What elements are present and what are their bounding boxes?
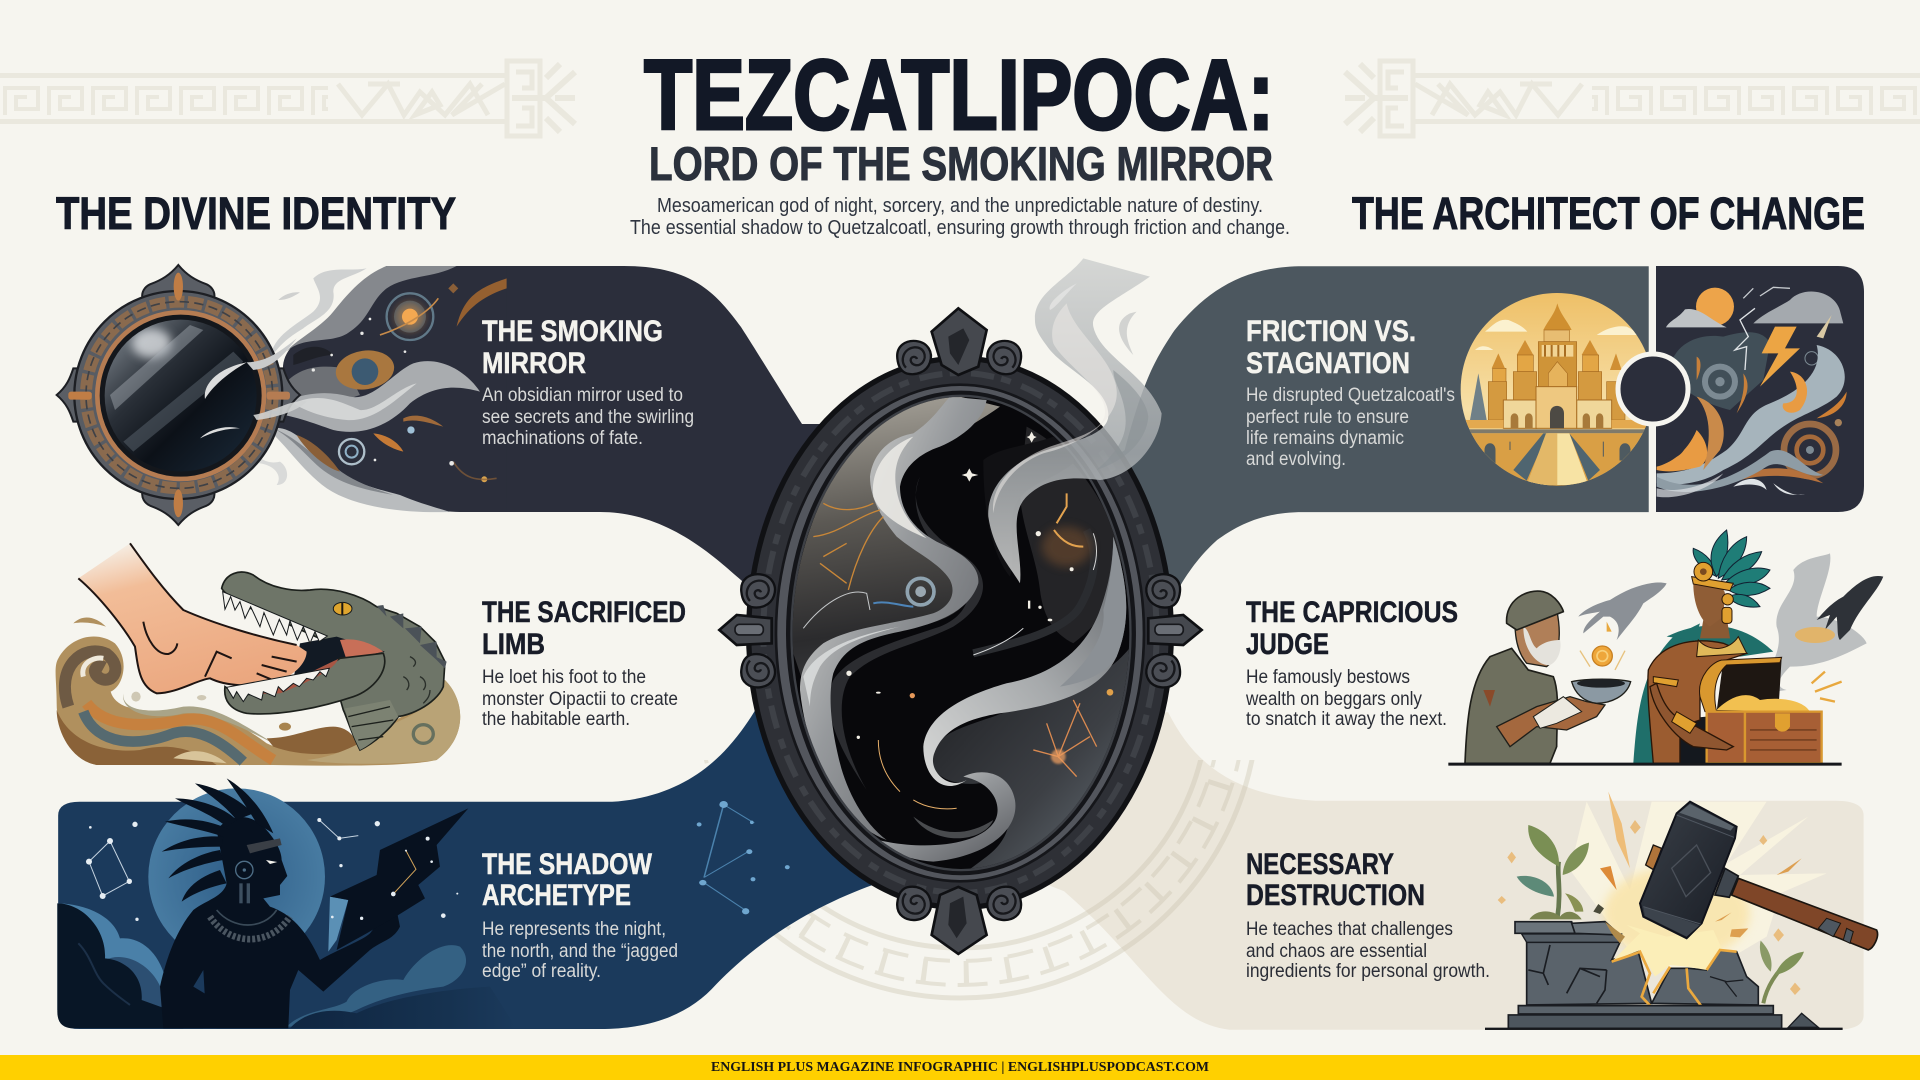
panel shape: chaos side <box>1656 266 1864 512</box>
text: necessary destruction: and chaos are essential <box>1246 941 1427 962</box>
text: the sacrificed limb: the habitable earth. <box>482 709 630 730</box>
text: friction vs stagnation: FRICTION VS. <box>1246 315 1416 348</box>
text: the sacrificed limb: monster Oipactii to create <box>482 689 678 710</box>
text: necessary destruction: He teaches that challenges <box>1246 919 1453 940</box>
text: the smoking mirror <box>482 315 694 449</box>
illustration: beggar and lord with treasure chest <box>1448 530 1883 766</box>
text: friction vs stagnation <box>1246 315 1455 470</box>
panel shape <box>58 709 980 1029</box>
smoke and cosmos art <box>200 266 507 512</box>
text: the capricious judge: JUDGE <box>1246 628 1329 661</box>
text: friction vs stagnation: perfect rule to ensure <box>1246 407 1409 428</box>
intro text <box>630 195 1290 239</box>
icon: dark circle <box>1618 354 1688 424</box>
text: the sacrificed limb <box>482 596 686 730</box>
text: friction vs stagnation: and evolving. <box>1246 449 1346 470</box>
illustration: golden city <box>1460 290 1653 490</box>
decorative band right <box>1345 61 1920 136</box>
rising smoke <box>988 258 1162 583</box>
text: the sacrificed limb: THE SACRIFICED <box>482 596 686 629</box>
intro text: Mesoamerican god of night, sorcery, and the unpredictable nature of destiny. <box>657 195 1263 217</box>
text: the sacrificed limb: LIMB <box>482 628 545 661</box>
subtitle: LORD OF THE SMOKING MIRROR <box>649 137 1273 190</box>
illustration: warrior silhouette with obsidian shard <box>57 778 517 1028</box>
panel: the smoking mirror <box>55 263 820 581</box>
central smoking mirror <box>719 258 1202 954</box>
text: necessary destruction <box>1246 848 1490 982</box>
illustration: storm of change <box>1657 287 1847 497</box>
panel shape <box>960 712 1864 1030</box>
title: TEZCATLIPOCA: <box>644 39 1274 150</box>
text: friction vs stagnation: He disrupted Quetzalcoatl's <box>1246 385 1455 406</box>
text: friction vs stagnation: STAGNATION <box>1246 347 1410 380</box>
footer bar <box>0 1055 1920 1080</box>
text: the capricious judge <box>1245 596 1458 730</box>
decorative band left <box>0 61 575 136</box>
illustration: hammer and pedestal <box>1485 792 1878 1030</box>
text: the capricious judge: wealth on beggars only <box>1245 689 1422 710</box>
intro text: The essential shadow to Quetzalcoatl, ensuring growth through friction and change. <box>630 217 1290 239</box>
greek key ring ornament <box>704 760 1254 1000</box>
heading: the divine identity: THE DIVINE IDENTITY <box>56 188 456 239</box>
text: the shadow archetype: He represents the night, <box>482 919 666 940</box>
text: necessary destruction: DESTRUCTION <box>1246 879 1425 912</box>
text: the capricious judge: He famously bestows <box>1246 667 1410 688</box>
panel shape <box>960 266 1649 585</box>
divider <box>1649 266 1656 512</box>
footer bar: ENGLISH PLUS MAGAZINE INFOGRAPHIC | ENGLISHPLUSPODCAST.COM <box>711 1060 1209 1075</box>
text: the smoking mirror: see secrets and the swirling <box>482 407 694 428</box>
panel: the shadow archetype <box>57 709 980 1029</box>
illustration: foot and crocodile <box>56 543 460 766</box>
text: the smoking mirror: machinations of fate. <box>482 428 643 449</box>
text: the shadow archetype: ARCHETYPE <box>482 879 631 912</box>
text: the shadow archetype <box>482 848 678 982</box>
panel: friction vs stagnation <box>1122 266 1864 585</box>
text: friction vs stagnation: life remains dynamic <box>1246 428 1404 449</box>
icon: obsidian medallion <box>57 265 307 525</box>
text: the smoking mirror: MIRROR <box>482 347 586 380</box>
panel: the sacrificed limb <box>56 543 686 766</box>
panel shape <box>490 266 980 585</box>
constellation <box>697 801 790 914</box>
text: the shadow archetype: the north, and the “jagged <box>482 941 678 962</box>
text: the smoking mirror: THE SMOKING <box>482 315 663 348</box>
text: the capricious judge: THE CAPRICIOUS <box>1246 596 1458 629</box>
text: the shadow archetype: THE SHADOW <box>482 848 653 881</box>
mirror frame <box>719 308 1202 954</box>
mirror glass with swirling smoke <box>790 395 1133 872</box>
text: the sacrificed limb: He loet his foot to the <box>482 667 646 688</box>
panel: the capricious judge <box>1245 530 1883 766</box>
text: necessary destruction: NECESSARY <box>1246 848 1394 881</box>
text: necessary destruction: ingredients for personal growth. <box>1246 961 1490 982</box>
text: the capricious judge: to snatch it away the next. <box>1246 709 1447 730</box>
panel: necessary destruction <box>704 712 1878 1030</box>
text: the smoking mirror: An obsidian mirror used to <box>482 385 683 406</box>
text: the shadow archetype: edge” of reality. <box>482 961 601 982</box>
